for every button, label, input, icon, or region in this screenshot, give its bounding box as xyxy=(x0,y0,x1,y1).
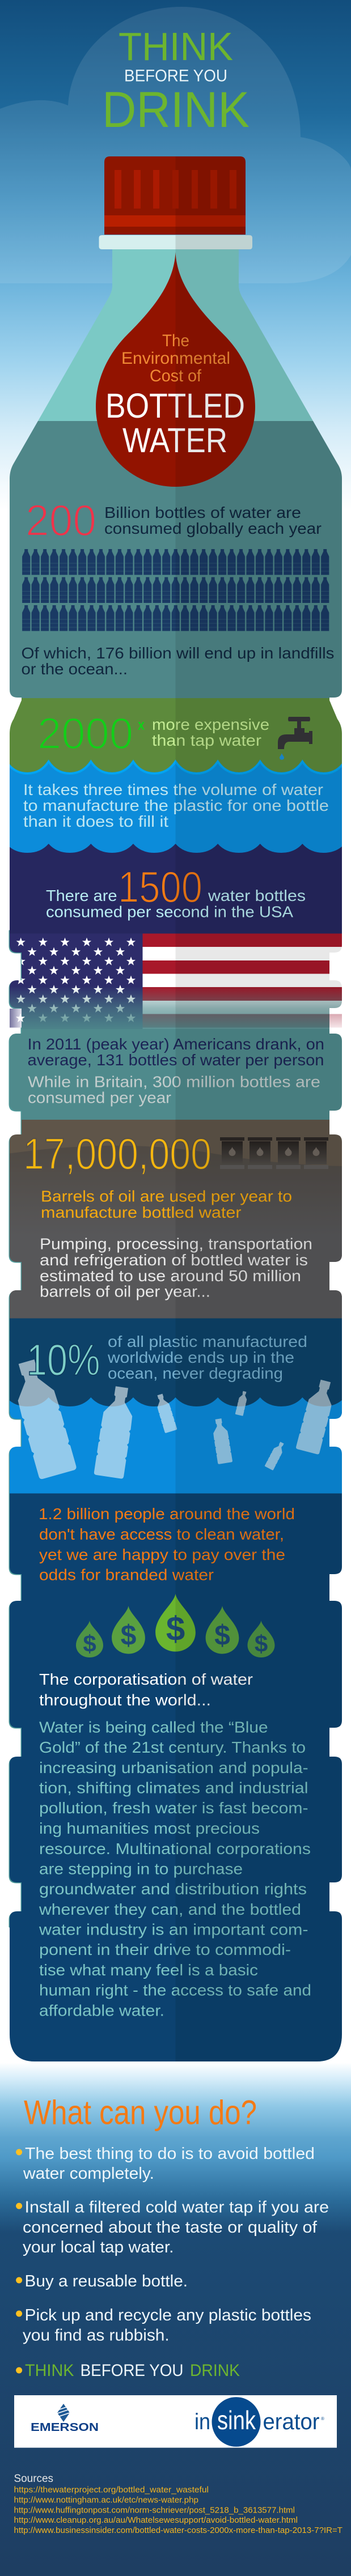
text: clean water access: 1.2 billion people around the world xyxy=(39,1505,295,1523)
panel: plastic in the ocean: of all plastic manufactured xyxy=(108,1333,307,1350)
text: blue gold: wherever they can, and the bottled xyxy=(39,1901,301,1918)
text: blue gold: are stepping in to purchase xyxy=(39,1860,243,1878)
teardrop title: Environmental xyxy=(121,349,230,368)
item: think before you drink: BEFORE YOU xyxy=(81,2361,184,2380)
sources: https://thewaterproject.org/bottled_water_wasteful xyxy=(14,2485,209,2494)
panel: 1500 bottles per second: consumed per second in the USA xyxy=(46,903,293,920)
item: recycle: Pick up and recycle any plastic bottles xyxy=(25,2306,311,2324)
item: think before you drink xyxy=(16,2361,240,2380)
stat: 200 billion: consumed globally each year xyxy=(104,520,322,537)
item: think before you drink: THINK xyxy=(25,2361,74,2380)
logo: Emerson xyxy=(31,2404,99,2434)
icon: dollar drops: $ xyxy=(214,1619,230,1651)
sources: http://www.cleanup.org.au/au/Whatelsewesupport/avoid-bottled-water.html xyxy=(14,2515,298,2525)
bottle cap xyxy=(99,156,252,249)
panel: 1500 bottles per second xyxy=(6,844,345,941)
panel: barrels of oil: estimated to use around 50 million xyxy=(40,1267,301,1285)
logos strip xyxy=(14,2395,337,2448)
panel: 2000x more expensive: 2000 xyxy=(37,708,133,758)
logo: InSinkErator: erator xyxy=(263,2409,320,2434)
text: blue gold: human right - the access to safe and xyxy=(39,1982,311,1999)
item: reusable bottle: Buy a reusable bottle. xyxy=(25,2272,188,2290)
panel: barrels of oil: Pumping, processing, transportation xyxy=(40,1235,312,1253)
text: blue gold: pollution, fresh water is fast becom- xyxy=(39,1799,308,1817)
title xyxy=(102,24,249,138)
stat: 200 billion xyxy=(26,495,322,545)
panel: plastic in the ocean xyxy=(0,1318,351,1494)
footer background xyxy=(0,2063,351,2576)
text: clean water access: yet we are happy to pay over the xyxy=(39,1546,285,1563)
sky background xyxy=(0,0,351,510)
logo: InSinkErator: ® xyxy=(321,2416,324,2421)
panel: 1500 bottles per second: 1500 xyxy=(118,862,202,912)
text: blue gold: increasing urbanisation and popula- xyxy=(39,1759,308,1776)
item: avoid bottled water: The best thing to do is to avoid bottled xyxy=(25,2145,315,2163)
text: clean water access xyxy=(39,1505,295,1584)
item: recycle xyxy=(16,2306,311,2345)
logo: Emerson: EMERSON xyxy=(31,2421,99,2434)
teardrop title: BOTTLED xyxy=(105,386,245,425)
panel: barrels of oil: Barrels of oil are used per year to xyxy=(41,1188,292,1205)
panel: 2000x more expensive: x xyxy=(138,716,145,733)
text: blue gold: Gold” of the 21st century. Thanks to xyxy=(39,1738,306,1756)
logo: InSinkErator xyxy=(194,2397,324,2447)
panel: plastic in the ocean: worldwide ends up in the xyxy=(107,1349,294,1366)
item: avoid bottled water: water completely. xyxy=(23,2165,154,2183)
text: landfills: Of which, 176 billion will end up in landfills xyxy=(22,644,335,662)
icon: dollar drops: $ xyxy=(166,1610,185,1648)
icon: oil barrels xyxy=(220,1137,328,1169)
panel: American and British consumption: While in Britain, 300 million bottles are xyxy=(28,1073,320,1090)
teardrop title: The xyxy=(162,331,189,350)
title: BEFORE YOU xyxy=(124,67,227,85)
sources: http://www.businessinsider.com/bottled-water-costs-2000x-more-than-tap-2013-7?IR=T xyxy=(14,2526,342,2535)
panel: barrels of oil xyxy=(0,1120,351,1319)
flag of the USA xyxy=(0,934,351,1035)
heading: corporatisation: throughout the world... xyxy=(39,1691,211,1709)
bottle right-side shading xyxy=(176,249,351,2063)
panel: American and British consumption: In 2011 (peak year) Americans drank, on xyxy=(27,1035,324,1053)
heading: what can you do: What can you do? xyxy=(24,2094,257,2132)
logo: InSinkErator: sink xyxy=(217,2405,256,2435)
item: avoid bottled water xyxy=(16,2145,315,2183)
icon: dollar drops xyxy=(76,1594,275,1657)
text: blue gold: water industry is an important com- xyxy=(39,1921,308,1939)
text: blue gold: ing humanities most precious xyxy=(39,1820,260,1837)
text: blue gold xyxy=(39,1718,311,2020)
panel: corporatisation of water xyxy=(0,1494,351,2063)
icon: dollar drops: $ xyxy=(255,1630,268,1657)
sources: http://www.nottingham.ac.uk/etc/news-water.php xyxy=(14,2496,198,2505)
cloud xyxy=(0,7,351,283)
panel: 2000x more expensive: than tap water xyxy=(152,732,261,749)
sources xyxy=(14,2473,342,2535)
item: think before you drink: DRINK xyxy=(190,2361,240,2380)
panel: plastic in the ocean: ocean, never degrading xyxy=(108,1364,283,1382)
panel: three times the volume of water: than it does to fill it xyxy=(23,813,168,830)
sources: http://www.huffingtonpost.com/norm-schriever/post_5218_b_3613577.html xyxy=(14,2506,295,2515)
panel: 1500 bottles per second: There are xyxy=(46,887,117,904)
panel: American and British consumption xyxy=(0,1029,351,1121)
text: blue gold: Water is being called the “Blue xyxy=(39,1718,268,1736)
panel: bottle upper water xyxy=(0,249,351,704)
panel: 2000x more expensive xyxy=(10,698,342,772)
icon: tap xyxy=(278,717,312,760)
text: blue gold: resource. Multinational corporations xyxy=(39,1840,311,1857)
item: filtered tap xyxy=(16,2199,329,2256)
icon: floating bottles xyxy=(8,1357,337,1480)
text: blue gold: affordable water. xyxy=(39,2001,164,2020)
panel: American and British consumption: consumed per year xyxy=(28,1089,171,1107)
panel: American and British consumption: average, 131 bottles of water per person xyxy=(27,1051,324,1069)
teardrop title: WATER xyxy=(122,421,227,460)
panel: plastic in the ocean: 10% xyxy=(27,1335,100,1385)
item: filtered tap: concerned about the taste or quality of xyxy=(23,2218,318,2237)
logo: InSinkErator: in xyxy=(194,2409,210,2434)
text: landfills: or the ocean... xyxy=(22,660,128,678)
item: recycle: you find as rubbish. xyxy=(23,2327,170,2345)
text: clean water access: odds for branded water xyxy=(39,1566,214,1584)
text: blue gold: groundwater and distribution rights xyxy=(39,1880,307,1898)
heading: corporatisation xyxy=(39,1670,253,1709)
panel: barrels of oil: and refrigeration of bottled water is xyxy=(40,1251,308,1269)
icon: dollar drops: $ xyxy=(121,1619,137,1651)
panel: three times the volume of water: to manufacture the plastic for one bottle xyxy=(23,797,329,814)
stat: 200 billion: Billion bottles of water are xyxy=(104,504,301,521)
teardrop title xyxy=(96,252,255,487)
pictogram: rows of bottles xyxy=(22,549,330,631)
teal rim behind bottle sections xyxy=(9,930,22,1928)
text: clean water access: don't have access to clean water, xyxy=(39,1525,284,1543)
item: filtered tap: your local tap water. xyxy=(23,2238,174,2256)
text: blue gold: ponent in their drive to commodi- xyxy=(39,1941,291,1958)
text: blue gold: tise what many feel is a basic xyxy=(39,1961,258,1979)
stat: 200 billion: 200 xyxy=(26,495,96,545)
item: filtered tap: Install a filtered cold water tap if you are xyxy=(25,2199,329,2217)
title: THINK xyxy=(119,24,233,69)
teardrop title: Cost of xyxy=(150,367,202,385)
sources: Sources xyxy=(14,2473,53,2485)
heading: corporatisation: The corporatisation of water xyxy=(39,1670,253,1688)
panel: barrels of oil: 17,000,000 xyxy=(23,1129,212,1179)
panel: 2000x more expensive: more expensive xyxy=(152,716,269,733)
panel: barrels of oil: barrels of oil per year... xyxy=(40,1283,210,1300)
icon: dollar drops: $ xyxy=(83,1630,96,1657)
text: blue gold: tion, shifting climates and industrial xyxy=(39,1779,308,1797)
panel: 1500 bottles per second: water bottles xyxy=(208,887,306,904)
panel: barrels of oil: manufacture bottled water xyxy=(41,1204,242,1221)
list: actions xyxy=(16,2145,329,2380)
panel: three times the volume of water xyxy=(6,760,345,861)
title: DRINK xyxy=(102,81,249,138)
text: landfills xyxy=(22,644,335,678)
panel: three times the volume of water: It takes three times the volume of water xyxy=(23,781,323,798)
